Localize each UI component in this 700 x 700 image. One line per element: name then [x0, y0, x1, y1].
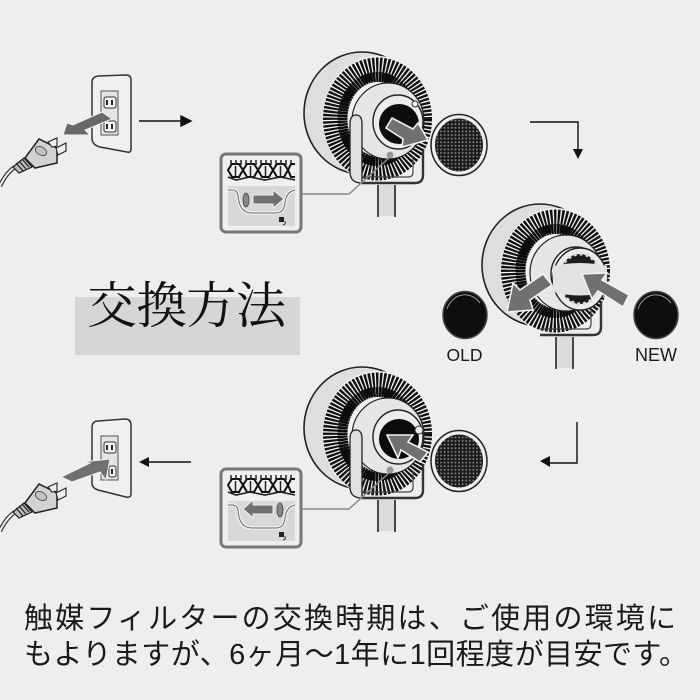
callout: slide lock closed [221, 469, 301, 547]
icon: attach arrow [387, 435, 428, 462]
label: NEW: NEW [635, 345, 677, 365]
fan illustration [482, 204, 610, 369]
icon: remove old arrow [507, 274, 552, 312]
step 1: unplug from outlet [0, 75, 131, 186]
callout: slide lock open [221, 154, 301, 232]
step 2: remove front cover [221, 52, 487, 232]
icon: plug-in arrow [61, 459, 110, 482]
label: OLD: OLD [447, 345, 482, 365]
icon: wall outlet [92, 75, 131, 152]
line 1: 触媒フィルターの交換時期は、ご使用の環境に [24, 602, 676, 635]
icon: plug [0, 138, 66, 186]
icon: plug [0, 483, 66, 531]
callout leader line [302, 152, 394, 194]
body text [24, 602, 688, 671]
icon: insert new arrow [582, 273, 629, 307]
step 3: replace filter [443, 204, 678, 369]
icon: removal arrow [386, 118, 428, 147]
icon: old filter [443, 292, 487, 338]
title band [75, 297, 300, 355]
fan illustration [304, 52, 432, 217]
title: 交換方法 [87, 278, 288, 334]
arrow: step 3 to step 4 [549, 422, 577, 463]
icon: unplug arrow [63, 112, 112, 135]
arrow: step 2 to step 3 [530, 122, 578, 150]
icon: wall outlet [92, 419, 131, 497]
icon: new filter [634, 292, 678, 338]
callout leader line [302, 466, 394, 509]
step 5: plug back in [0, 419, 131, 531]
arrow: step 1 to step 2 [139, 116, 191, 126]
icon: mesh cover [431, 114, 487, 176]
arrow: step 4 to step 5 [149, 461, 191, 463]
icon: mesh cover [431, 430, 487, 492]
fan illustration [304, 367, 432, 532]
step 4: reattach cover [221, 367, 487, 547]
line 2: もよりますが、6ヶ月〜1年に1回程度が目安です。 [24, 638, 688, 671]
